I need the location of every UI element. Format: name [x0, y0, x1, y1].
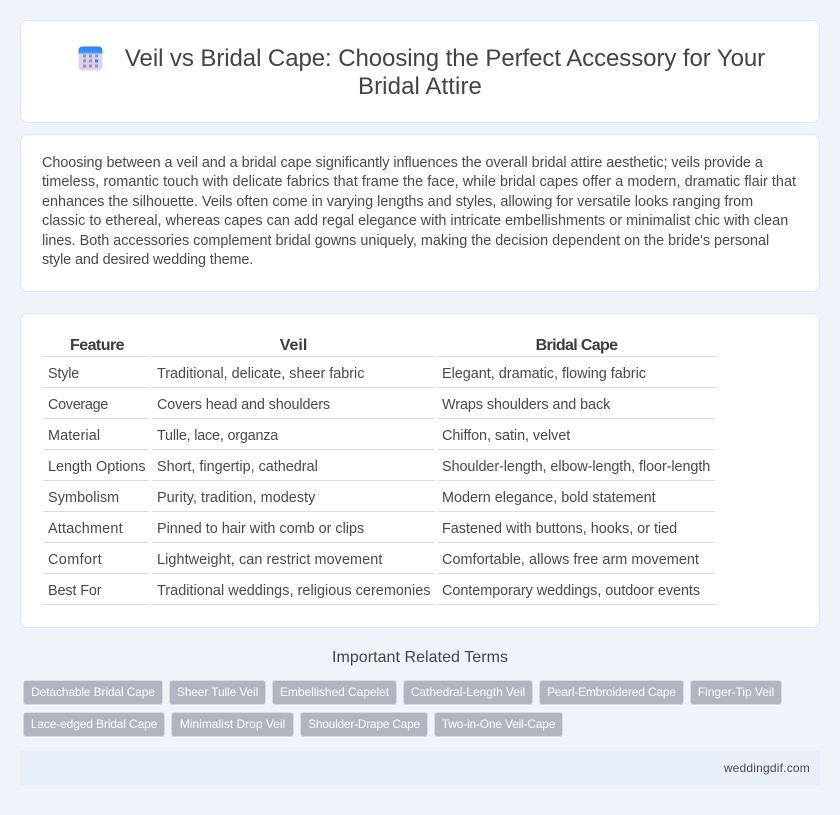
row: Material	[43, 428, 715, 450]
table header: Feature	[70, 337, 124, 354]
panel: intro text	[20, 134, 820, 292]
title: Veil vs Bridal Cape: Choosing the Perfect Accessory for Your	[125, 45, 765, 72]
row: Coverage: Wraps shoulders and back	[442, 397, 610, 413]
row: Style: Traditional, delicate, sheer fabric	[157, 366, 364, 382]
row: Style: Style	[48, 366, 79, 382]
row: Coverage: Covers head and shoulders	[157, 397, 330, 413]
row: Length Options: Shoulder-length, elbow-length, floor-length	[442, 459, 710, 475]
footer bar	[20, 751, 820, 785]
related terms chips: Two-in-One Veil-Cape	[442, 717, 555, 731]
row: Length Options: Length Options	[48, 459, 146, 475]
intro paragraph: timeless, romantic touch with delicate fabrics that frame the face, while bridal capes offer a modern, dramatic flair that	[42, 174, 796, 190]
row: Best For: Traditional weddings, religious ceremonies	[157, 583, 431, 599]
row: Length Options: Short, fingertip, cathedral	[157, 459, 318, 475]
intro paragraph: style and desired wedding theme.	[42, 252, 253, 268]
row: Comfort: Lightweight, can restrict movement	[157, 552, 382, 568]
intro paragraph: enhances the silhouette. Veils often come in varying lengths and styles, allowing for versatile looks ranging from	[42, 194, 753, 210]
row: Comfort: Comfort	[48, 552, 102, 568]
related terms chips: Minimalist Drop Veil	[180, 717, 285, 731]
panel: comparison table	[20, 313, 820, 628]
related terms heading: Important Related Terms	[332, 649, 508, 666]
intro paragraph	[42, 155, 796, 268]
row: Attachment: Fastened with buttons, hooks, or tied	[442, 521, 677, 537]
intro paragraph: Choosing between a veil and a bridal cape significantly influences the overall bridal attire aesthetic; veils provide a	[42, 155, 763, 171]
row: Comfort: Comfortable, allows free arm movement	[442, 552, 699, 568]
row: Style: Elegant, dramatic, flowing fabric	[442, 366, 646, 382]
row: Attachment: Attachment	[48, 521, 123, 537]
row: Coverage	[43, 397, 715, 419]
title	[125, 45, 765, 100]
comparison table	[43, 337, 715, 605]
related terms chips	[23, 680, 782, 737]
related terms chips: Shoulder-Drape Cape	[308, 717, 420, 731]
related terms chips: Pearl-Embroidered Cape	[547, 685, 676, 699]
title: Bridal Attire	[358, 73, 482, 100]
row: Symbolism	[43, 490, 715, 512]
row: Attachment: Pinned to hair with comb or clips	[157, 521, 364, 537]
header panel	[20, 20, 820, 123]
table header: Veil	[280, 337, 307, 354]
row: Material: Chiffon, satin, velvet	[442, 428, 570, 444]
row: Style	[43, 366, 715, 388]
related terms chips: Sheer Tulle Veil	[177, 685, 258, 699]
row: Material: Tulle, lace, organza	[157, 428, 278, 444]
icon: calendar	[78, 46, 102, 70]
table header: Bridal Cape	[536, 337, 617, 354]
row: Symbolism: Purity, tradition, modesty	[157, 490, 315, 506]
related terms chips: Finger-Tip Veil	[698, 685, 774, 699]
row: Comfort	[43, 552, 715, 574]
row: Attachment	[43, 521, 715, 543]
related terms chips: Detachable Bridal Cape	[31, 685, 155, 699]
row: Best For: Contemporary weddings, outdoor events	[442, 583, 700, 599]
intro paragraph: classic to ethereal, whereas capes can add regal elegance with intricate embellishments or minimalist chic with clean	[42, 213, 788, 229]
row: Best For: Best For	[48, 583, 101, 599]
related terms chips: Lace-edged Bridal Cape	[31, 717, 157, 731]
row: Coverage: Coverage	[48, 397, 108, 413]
table header	[43, 337, 715, 357]
row: Symbolism: Modern elegance, bold statement	[442, 490, 656, 506]
footer source: weddingdif.com	[724, 761, 810, 775]
related terms chips: Embellished Capelet	[280, 685, 389, 699]
intro paragraph: lines. Both accessories complement bridal gowns uniquely, making the decision dependent on the bride's personal	[42, 233, 769, 249]
row: Material: Material	[48, 428, 100, 444]
row: Length Options	[43, 459, 715, 481]
related terms chips: Cathedral-Length Veil	[411, 685, 525, 699]
row: Symbolism: Symbolism	[48, 490, 119, 506]
row: Best For	[43, 583, 715, 605]
